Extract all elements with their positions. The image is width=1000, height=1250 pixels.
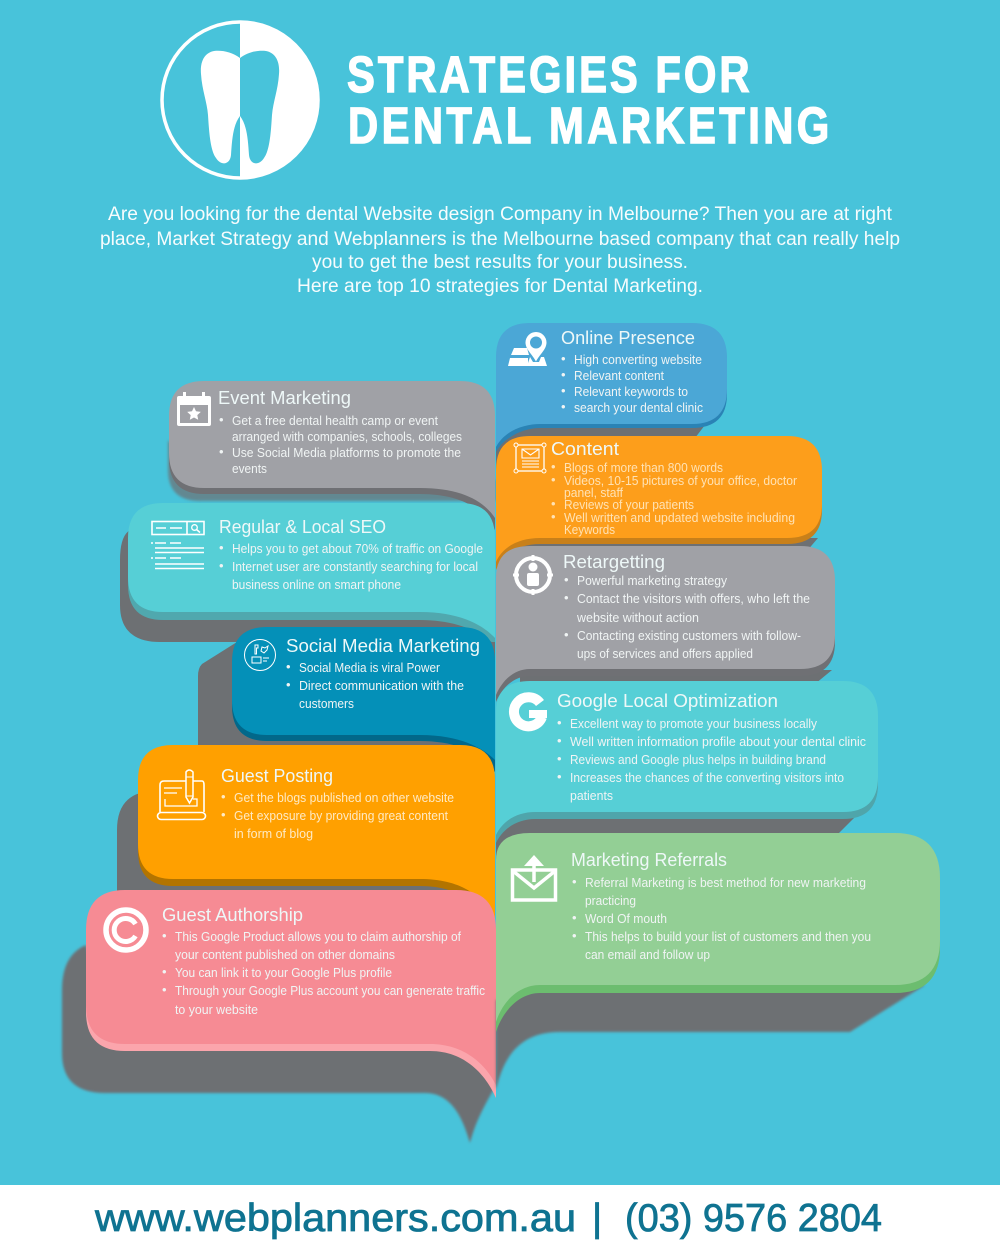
bullet list: Online Presence: search your dental clinic: [574, 400, 703, 415]
bullet list: Content: •: [551, 472, 556, 487]
bullet list: Content: •: [551, 459, 556, 474]
bullet list: Online Presence: [561, 351, 703, 415]
bullet list: Online Presence: •: [561, 383, 566, 398]
bullet list: Regular & Local SEO: business online on smart phone: [232, 577, 401, 592]
bullet list: Regular & Local SEO: Helps you to get about 70% of traffic on Google: [232, 541, 483, 556]
bullet list: Marketing Referrals: •: [572, 910, 577, 925]
bullet list: Event Marketing: •: [219, 444, 224, 459]
bullet list: Guest Authorship: •: [162, 928, 167, 943]
heading: Content: Content: [551, 438, 619, 459]
bullet list: Event Marketing: •: [219, 412, 224, 427]
bullet list: Guest Authorship: •: [162, 982, 167, 997]
heading: Guest Authorship: Guest Authorship: [162, 904, 303, 925]
panel: Guest Posting: [117, 745, 495, 935]
bullet list: Guest Authorship: [162, 928, 485, 1017]
heading: Google Local Optimization: Google Local Optimization: [557, 690, 778, 711]
bullet list: Content: panel, staff: [564, 485, 623, 500]
bubble shape: Content: [496, 436, 822, 570]
icon: copyright symbol: [106, 910, 146, 950]
bullet list: Social Media Marketing: •: [286, 659, 291, 674]
bullet list: Regular & Local SEO: [219, 540, 483, 592]
heading: Online Presence: Online Presence: [561, 327, 695, 348]
panel: Retargetting: [496, 546, 835, 702]
bullet list: Guest Authorship: Through your Google Plus account you can generate traffic: [175, 983, 485, 998]
bullet list: Retargetting: [564, 572, 810, 661]
bullet list: Content: Blogs of more than 800 words: [564, 460, 723, 475]
intro text block: Here are top 10 strategies for Dental Marketing.: [297, 276, 703, 297]
bullet list: Content: [551, 459, 798, 537]
bullet list: Content: Reviews of your patients: [564, 497, 694, 512]
bubble shape: Retargetting: [496, 546, 835, 702]
bullet list: Online Presence: High converting website: [574, 352, 702, 367]
intro text block: place, Market Strategy and Webplanners is the Melbourne based company that can really help: [100, 229, 900, 250]
bullet list: Retargetting: •: [564, 627, 569, 642]
bullet list: Marketing Referrals: practicing: [585, 893, 636, 908]
bullet list: Guest Posting: •: [221, 789, 226, 804]
bullet list: Google Local Optimization: Excellent way to promote your business locally: [570, 716, 817, 731]
bullet list: Online Presence: •: [561, 367, 566, 382]
bullet list: Marketing Referrals: Word Of mouth: [585, 911, 667, 926]
bullet list: Marketing Referrals: [572, 874, 871, 962]
bullet list: Guest Authorship: •: [162, 964, 167, 979]
heading: Guest Posting: Guest Posting: [221, 765, 333, 786]
bullet list: Google Local Optimization: Well written information profile about your dental clinic: [570, 734, 866, 749]
bullet list: Social Media Marketing: customers: [299, 696, 354, 711]
bullet list: Event Marketing: arranged with companies, schools, colleges: [232, 429, 462, 444]
bullet list: Google Local Optimization: •: [557, 733, 562, 748]
heading: Regular & Local SEO: Regular & Local SEO: [219, 516, 386, 537]
icon: map pin and map: [508, 332, 547, 366]
bullet list: Google Local Optimization: Reviews and Google plus helps in building brand: [570, 752, 826, 767]
bullet list: Content: Well written and updated website including: [564, 510, 795, 525]
bullet list: Online Presence: Relevant keywords to: [574, 384, 688, 399]
bubble shape: Social Media Marketing: [198, 627, 495, 772]
heading: Retargetting: Retargetting: [563, 551, 665, 572]
icon: envelope with up arrow: [512, 855, 556, 900]
heading: Marketing Referrals: Marketing Referrals: [571, 849, 727, 870]
bullet list: Google Local Optimization: •: [557, 769, 562, 784]
footer contact text: |: [592, 1197, 602, 1240]
panel: Event Marketing: [168, 381, 495, 530]
bullet list: Marketing Referrals: This helps to build your list of customers and then you: [585, 929, 871, 944]
bullet list: Guest Posting: in form of blog: [234, 826, 313, 841]
intro text block: Are you looking for the dental Website design Company in Melbourne? Then you are at right: [108, 204, 893, 225]
bullet list: Marketing Referrals: •: [572, 874, 577, 889]
bubble shape: Online Presence: [496, 323, 727, 500]
bullet list: Social Media Marketing: Social Media is viral Power: [299, 660, 441, 675]
bubble shape: Guest Posting: [117, 745, 495, 935]
bullet list: Regular & Local SEO: Internet user are constantly searching for local: [232, 559, 478, 574]
heading: Event Marketing: Event Marketing: [218, 387, 351, 408]
bullet list: Content: Keywords: [564, 522, 615, 537]
bullet list: Event Marketing: [219, 412, 462, 476]
bullet list: Marketing Referrals: •: [572, 928, 577, 943]
bubble shape: Guest Authorship: [62, 890, 496, 1143]
bullet list: Marketing Referrals: Referral Marketing is best method for new marketing: [585, 875, 866, 890]
logo: tooth in a circle: [162, 21, 319, 179]
bullet list: Online Presence: •: [561, 399, 566, 414]
panel: Regular & Local SEO: [120, 503, 495, 645]
footer contact text: www.webplanners.com.au: [94, 1197, 576, 1240]
bullet list: Retargetting: Contacting existing customers with follow-: [577, 628, 801, 643]
bullet list: Content: •: [551, 496, 556, 511]
bullet list: Social Media Marketing: [286, 659, 464, 711]
icon: content frame with envelope: [514, 443, 546, 473]
icon: letter G: [514, 697, 547, 726]
panel: Google Local Optimization: [496, 681, 878, 880]
footer contact text: (03) 9576 2804: [625, 1197, 882, 1240]
bullet list: Content: •: [551, 509, 556, 524]
bubble shape: Event Marketing: [168, 381, 495, 530]
bullet list: Google Local Optimization: [557, 715, 866, 803]
bubble shape: Marketing Referrals: [496, 833, 940, 1090]
bullet list: Guest Authorship: to your website: [175, 1002, 258, 1017]
bullet list: Retargetting: Contact the visitors with offers, who left the: [577, 591, 810, 606]
bullet list: Google Local Optimization: •: [557, 715, 562, 730]
footer contact text: [94, 1197, 882, 1240]
title: DENTAL MARKETING: [348, 97, 829, 154]
bullet list: Guest Authorship: This Google Product allows you to claim authorship of: [175, 929, 461, 944]
bullet list: Social Media Marketing: •: [286, 677, 291, 692]
bullet list: Event Marketing: Get a free dental health camp or event: [232, 413, 438, 428]
panel: Guest Authorship: [62, 890, 496, 1143]
footer band: [0, 1185, 1000, 1250]
bubble shape: Regular & Local SEO: [120, 503, 495, 645]
bullet list: Retargetting: ups of services and offers applied: [577, 646, 753, 661]
bullet list: Regular & Local SEO: •: [219, 558, 224, 573]
bullet list: Online Presence: Relevant content: [574, 368, 664, 383]
heading: Social Media Marketing: Social Media Marketing: [286, 635, 480, 656]
icon: search bar and text lines: [151, 522, 204, 568]
bullet list: Content: Videos, 10-15 pictures of your office, doctor: [564, 473, 798, 488]
bullet list: Retargetting: •: [564, 572, 569, 587]
panel: Social Media Marketing: [198, 627, 495, 772]
icon: target with person: [513, 555, 553, 595]
bubble shape: Google Local Optimization: [496, 681, 878, 880]
bullet list: Social Media Marketing: Direct communication with the: [299, 678, 464, 693]
bullet list: Retargetting: website without action: [576, 610, 699, 625]
panel: Content: [496, 436, 822, 570]
bullet list: Online Presence: •: [561, 351, 566, 366]
bullet list: Event Marketing: events: [232, 461, 267, 476]
panel: Online Presence: [496, 323, 727, 500]
panel: Marketing Referrals: [496, 833, 940, 1090]
bullet list: Google Local Optimization: •: [557, 751, 562, 766]
bullet list: Event Marketing: Use Social Media platforms to promote the: [232, 445, 461, 460]
intro text block: [100, 204, 900, 297]
icon: calendar with star: [177, 392, 211, 426]
icon: social media circle: [244, 640, 276, 670]
icon: laptop with pencil: [158, 770, 206, 820]
bullet list: Guest Posting: [221, 789, 454, 841]
bullet list: Guest Authorship: You can link it to your Google Plus profile: [175, 965, 392, 980]
bullet list: Google Local Optimization: Increases the chances of the converting visitors into: [570, 770, 844, 785]
bullet list: Regular & Local SEO: •: [219, 540, 224, 555]
title: STRATEGIES FOR: [347, 46, 750, 103]
bullet list: Marketing Referrals: can email and follow up: [585, 947, 710, 962]
bullet list: Guest Posting: •: [221, 807, 226, 822]
bullet list: Guest Authorship: your content published on other domains: [175, 947, 395, 962]
bullet list: Guest Posting: Get exposure by providing great content: [234, 808, 448, 823]
bullet list: Retargetting: Powerful marketing strategy: [577, 573, 727, 588]
title: [347, 46, 829, 154]
bullet list: Google Local Optimization: patients: [570, 788, 613, 803]
bullet list: Guest Posting: Get the blogs published on other website: [234, 790, 454, 805]
intro text block: you to get the best results for your business.: [312, 252, 688, 273]
bullet list: Retargetting: •: [564, 590, 569, 605]
